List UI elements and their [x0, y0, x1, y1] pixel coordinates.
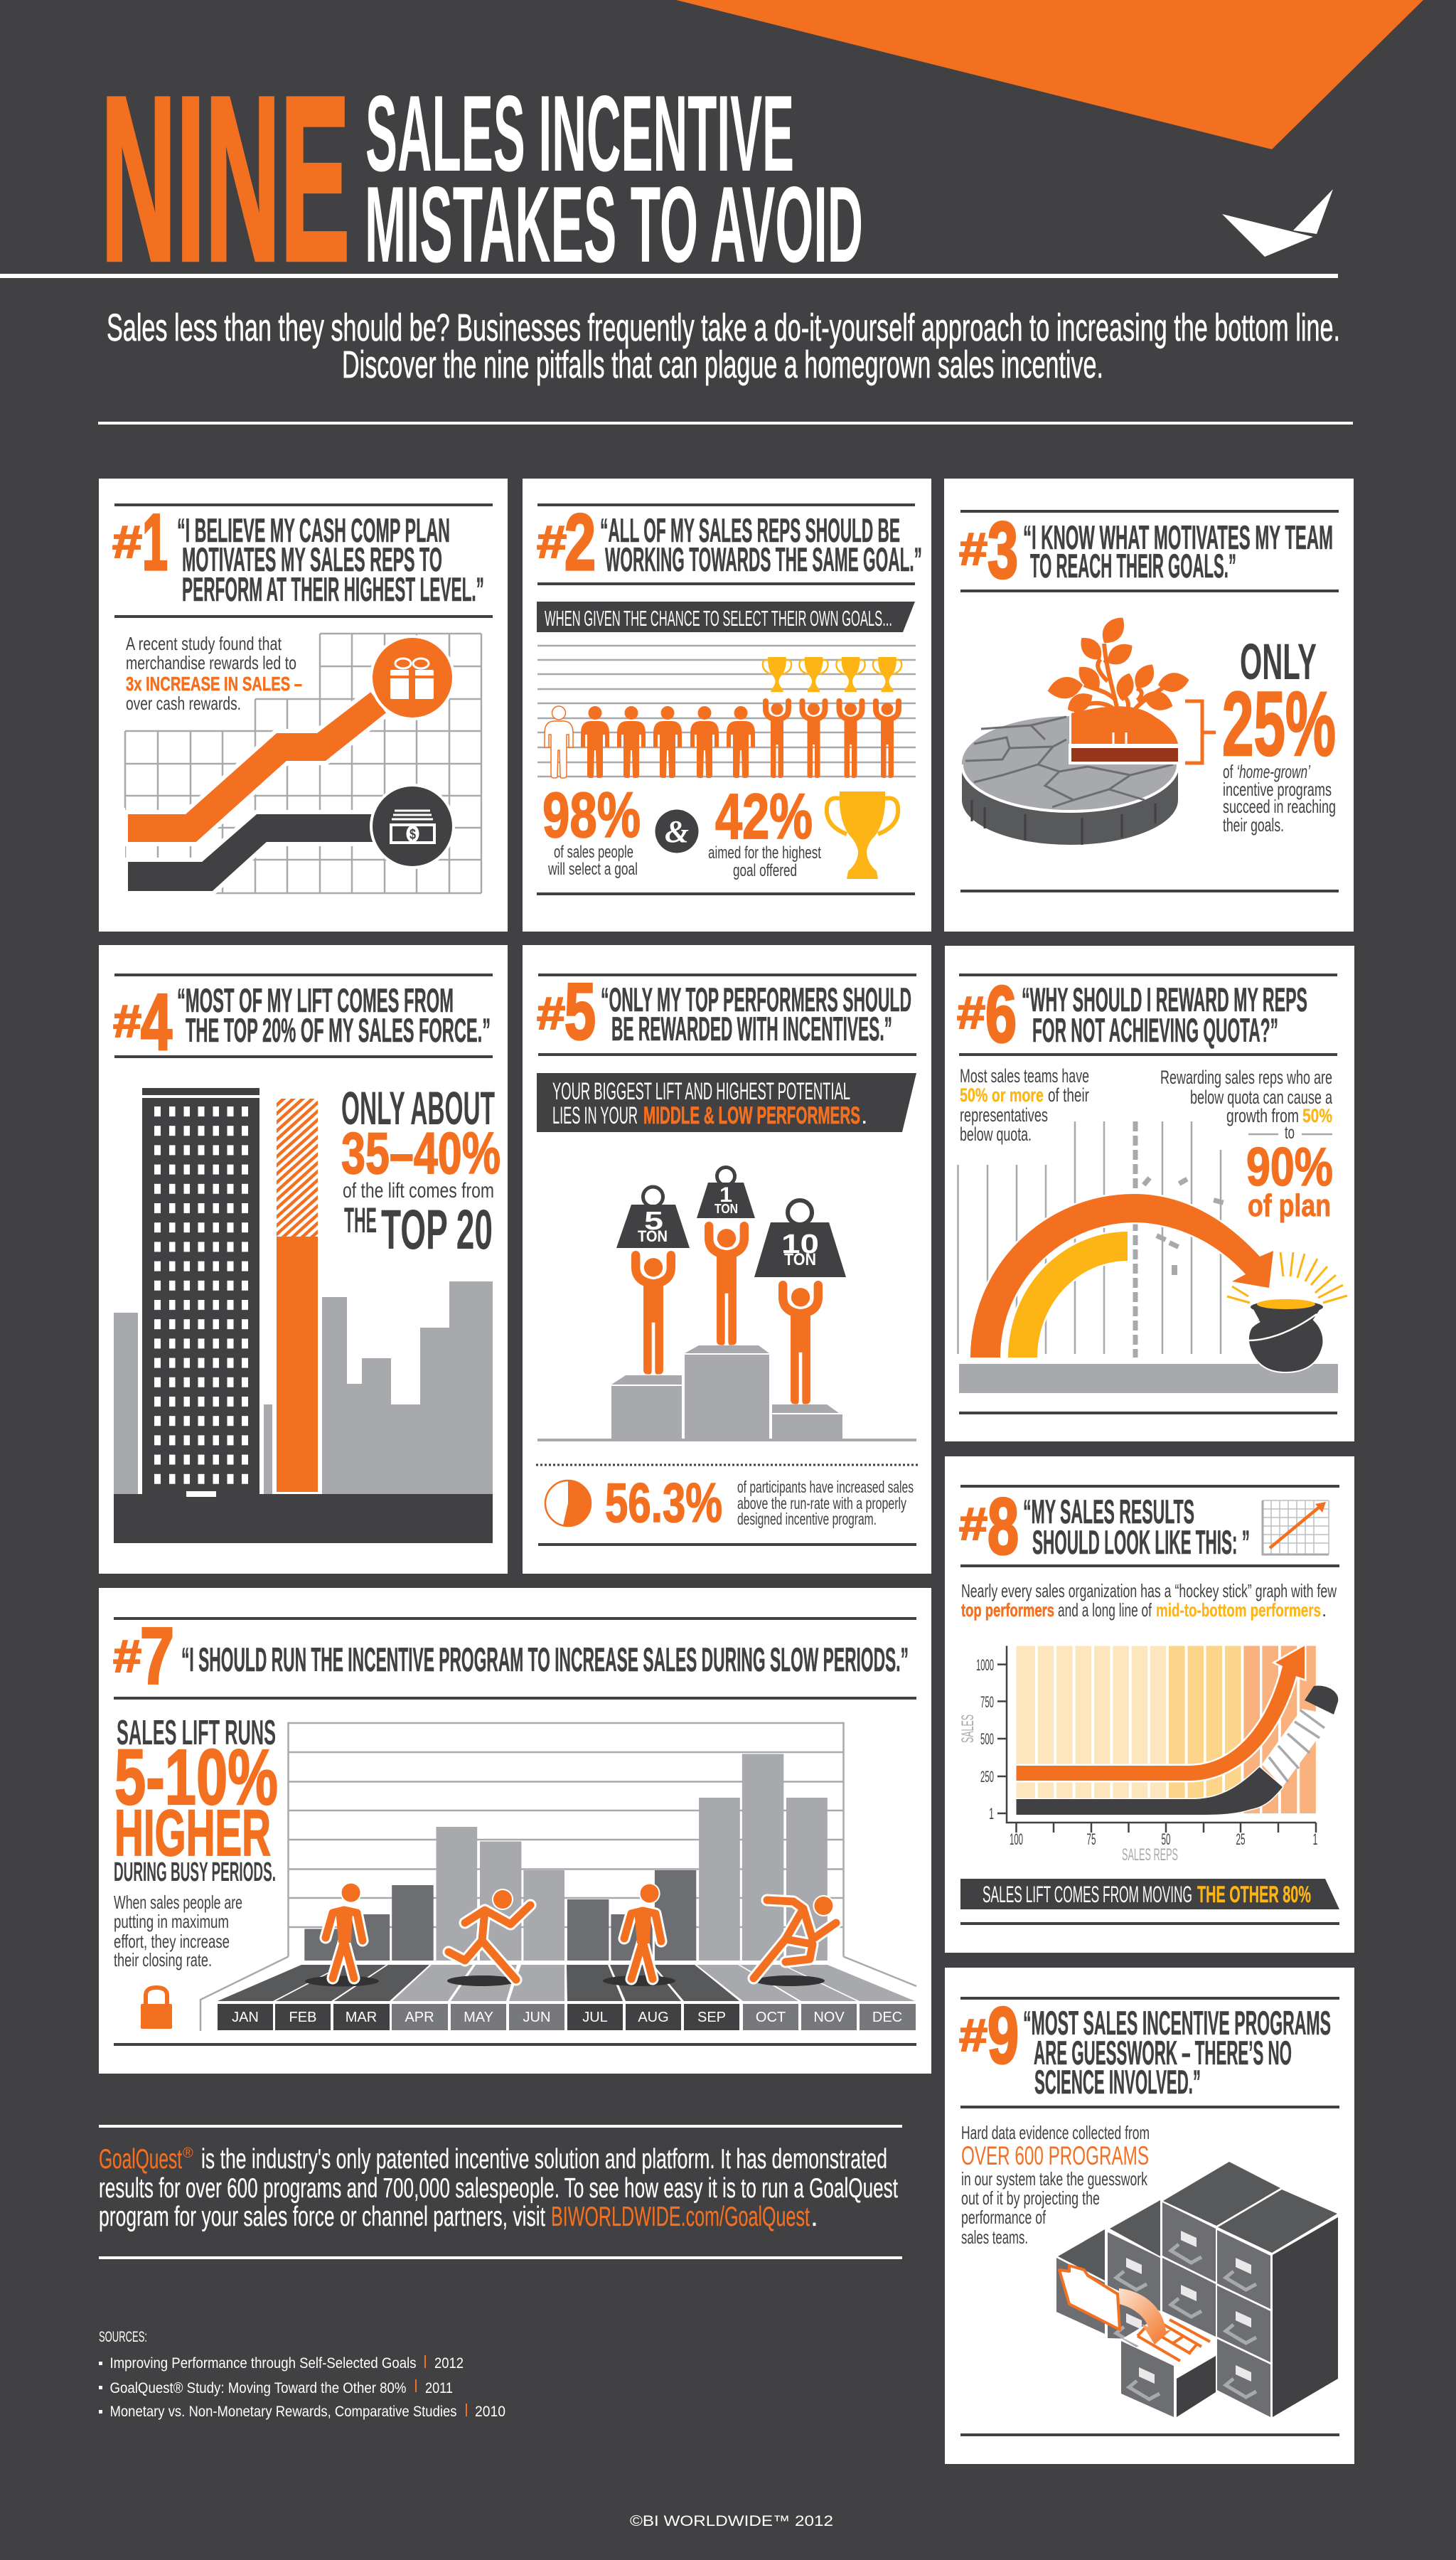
- icon: plant: [1046, 612, 1191, 744]
- text: hockey stick: [961, 1580, 1337, 1621]
- copyright: ©BI WORLDWIDE™ 2012: [630, 2513, 833, 2529]
- icon: ampersand: &: [665, 814, 689, 849]
- weight: 1 ton: TON: [714, 1202, 738, 1216]
- stat: 42%: goal offered: [733, 861, 797, 880]
- icon: logo check mark: [1222, 189, 1333, 257]
- text: hard data: performance of: [961, 2207, 1046, 2228]
- sources: GoalQuest® Study: Moving Toward the Other 80%: [109, 2380, 407, 2396]
- icon: gift: [370, 635, 455, 720]
- stat: 98%: of sales people: [554, 843, 633, 862]
- heading: mistake 8: [959, 1482, 1250, 1571]
- axis labels: 750: [980, 1693, 994, 1711]
- text: hard data: sales teams.: [961, 2226, 1028, 2248]
- axis labels: 75: [1086, 1830, 1096, 1848]
- chart: pie 56.3 percent: [545, 1481, 592, 1526]
- month labels: SEP: [697, 2010, 726, 2025]
- axis labels: 1: [1312, 1830, 1318, 1848]
- sources: SOURCES:: [99, 2329, 147, 2345]
- stat: 35-40%: ONLY ABOUT: [341, 1082, 495, 1134]
- sources: [99, 2329, 505, 2420]
- closing statement: is the industry's only patented incentive solution and platform. It has demonstrated: [201, 2144, 887, 2175]
- figure: runner one: [449, 1889, 530, 1980]
- stat: only 25%: of ‘home-grown’: [1223, 761, 1311, 782]
- stat: 5-10% higher: effort, they increase: [114, 1931, 230, 1952]
- chart: monthly sales bars: [200, 1723, 916, 2031]
- stat: 35-40%: 35–40%: [341, 1120, 500, 1186]
- month labels: AUG: [638, 2010, 669, 2025]
- chart: hockey stick graph: [958, 1646, 1338, 1865]
- chart: rising merchandise line over cash line: [121, 634, 481, 900]
- stat: 56.3%: above the run-rate with a properly: [737, 1494, 906, 1513]
- panel: mistake 1: PERFORM AT THEIR HIGHEST LEVEL.”: [182, 570, 484, 608]
- axis labels: 50: [1162, 1830, 1170, 1848]
- sources: 2011: [425, 2380, 453, 2396]
- text: hard data: [961, 2122, 1150, 2248]
- heading: mistake 1: [112, 498, 484, 608]
- stat: 42%: 42%: [715, 782, 813, 853]
- heading: mistake 1: #: [112, 516, 142, 567]
- heading: mistake 7: 7: [140, 1611, 174, 1700]
- text: below quota: Most sales teams have: [960, 1065, 1089, 1087]
- hockey stick: [1017, 1685, 1338, 1815]
- text: growth to 90 percent of plan: below quota can cause a: [1190, 1087, 1333, 1108]
- text: study finding: merchandise rewards led to: [126, 652, 296, 673]
- banner: select goals: [537, 602, 915, 632]
- axis labels: 500: [980, 1730, 994, 1748]
- text: hockey stick: top performers: [961, 1599, 1054, 1621]
- heading: mistake 7: #: [113, 1631, 141, 1682]
- icon: padlock: [141, 1988, 172, 2029]
- heading: mistake 8: “MY SALES RESULTS: [1023, 1493, 1194, 1530]
- heading: mistake 3: 3: [987, 506, 1018, 594]
- month labels: JUN: [523, 2010, 550, 2025]
- closing statement: program for your sales force or channel partners, visit: [99, 2202, 545, 2232]
- heading: mistake 6: [957, 970, 1307, 1059]
- month labels: DEC: [872, 2010, 902, 2025]
- panel: mistake 5: [523, 945, 931, 1574]
- text: growth to 90 percent of plan: growth from: [1226, 1105, 1299, 1126]
- axis labels: 1: [989, 1805, 994, 1823]
- stat: only 25%: ONLY: [1240, 634, 1317, 690]
- text: below quota: below quota.: [960, 1124, 1032, 1145]
- heading: mistake 5: BE REWARDED WITH INCENTIVES.”: [611, 1010, 892, 1047]
- chart: pictogram of sales people and trophies: [537, 646, 916, 778]
- stat: 56.3%: of participants have increased sales: [737, 1478, 914, 1496]
- closing statement: BIWORLDWIDE.com/GoalQuest: [551, 2202, 810, 2232]
- stat: 35-40%: TOP 20: [381, 1198, 493, 1261]
- stat: 42%: aimed for the highest: [708, 843, 821, 863]
- heading: mistake 2: #: [537, 516, 567, 567]
- text: growth to 90 percent of plan: [1160, 1067, 1333, 1223]
- stat: 56.3%: designed incentive program.: [737, 1510, 877, 1528]
- title: SALES INCENTIVE: [365, 73, 794, 194]
- weight: 5 ton: TON: [638, 1227, 668, 1245]
- heading: mistake 2: “ALL OF MY SALES REPS SHOULD BE: [600, 511, 900, 549]
- banner: biggest lift: LIES IN YOUR: [552, 1102, 638, 1129]
- weight: 5 ton: 5: [644, 1206, 663, 1235]
- text: below quota: 50% or more: [960, 1084, 1044, 1106]
- month labels: MAR: [346, 2010, 377, 2025]
- text: hockey stick: and a long line of: [1058, 1599, 1152, 1621]
- text: WORKING TOWARDS THE SAME GOAL.”: [605, 540, 922, 578]
- stat: only 25%: 25%: [1222, 673, 1336, 775]
- arrow and folder: [1059, 2266, 1172, 2345]
- icon: cash: [370, 784, 455, 869]
- heading: mistake 5: [537, 967, 911, 1056]
- month labels: MAY: [464, 2010, 493, 2025]
- text: MISTAKES TO AVOID: [365, 164, 863, 285]
- closing statement: results for over 600 programs and 700,000 salespeople. To see how easy it is to run a GoalQuest: [99, 2173, 898, 2204]
- closing statement: GoalQuest: [99, 2144, 182, 2175]
- stat: 98%: 98%: [542, 780, 641, 851]
- figure: walker two: [624, 1883, 661, 1979]
- sources: Monetary vs. Non-Monetary Rewards, Comparative Studies: [109, 2404, 456, 2420]
- heading: mistake 4: THE TOP 20% OF MY SALES FORCE.”: [186, 1011, 491, 1049]
- text: study finding: A recent study found that: [126, 633, 282, 654]
- text: growth to 90 percent of plan: 90%: [1246, 1137, 1333, 1198]
- text: growth to 90 percent of plan: 50%: [1302, 1105, 1332, 1126]
- sources: 2010: [475, 2404, 505, 2420]
- stat: 56.3%: 56.3%: [605, 1471, 722, 1534]
- weight: 1 ton: [697, 1168, 755, 1218]
- weight: 10 ton: TON: [784, 1250, 816, 1269]
- heading: mistake 6: #: [957, 987, 985, 1038]
- text: hockey stick: .: [1322, 1599, 1327, 1621]
- icon: cash: $: [410, 827, 416, 843]
- axis labels: 100: [1010, 1830, 1023, 1848]
- figure: walker one: [326, 1882, 363, 1978]
- heading: mistake 2: 2: [564, 498, 596, 587]
- month labels: APR: [405, 2010, 434, 2025]
- axis labels: [958, 1656, 1318, 1865]
- heading: mistake 2: [537, 498, 922, 587]
- stat: 35-40%: of the lift comes from: [343, 1179, 494, 1202]
- heading: mistake 1: MOTIVATES MY SALES REPS TO: [182, 540, 442, 578]
- text: growth to 90 percent of plan: to: [1285, 1123, 1295, 1143]
- orange corner shape: [676, 0, 1423, 149]
- stat: only 25%: [1222, 634, 1336, 836]
- text: below quota: representatives: [960, 1104, 1048, 1126]
- stat: only 25%: their goals.: [1223, 814, 1284, 836]
- stat: 35-40%: [341, 1082, 500, 1261]
- heading: mistake 3: #: [959, 523, 987, 575]
- banner: biggest lift: MIDDLE & LOW PERFORMERS: [643, 1102, 860, 1129]
- text: hard data: in our system take the guesswork: [961, 2168, 1148, 2190]
- icon: mini rising chart: [1263, 1500, 1329, 1554]
- illustration: arc to pot of gold: [958, 1121, 1347, 1393]
- stat: 5-10% higher: [114, 1714, 278, 1970]
- sources: Improving Performance through Self-Selected Goals: [109, 2355, 417, 2372]
- weight: 10 ton: [754, 1200, 846, 1277]
- bracket: [1185, 701, 1216, 763]
- banner: biggest lift: [537, 1073, 916, 1132]
- icon: ampersand: [655, 809, 698, 853]
- text: hard data: OVER 600 PROGRAMS: [961, 2141, 1149, 2170]
- panel: mistake 3: [944, 479, 1354, 932]
- heading: mistake 4: 4: [141, 978, 172, 1067]
- illustration: podium with weights: [537, 1168, 916, 1441]
- weight: 1 ton: 1: [719, 1183, 732, 1207]
- month labels: OCT: [756, 2010, 786, 2025]
- heading: mistake 8: #: [959, 1498, 987, 1550]
- stat: 5-10% higher: 5-10%: [114, 1734, 278, 1821]
- panel: mistake 4: [99, 945, 508, 1574]
- axis labels: 250: [980, 1768, 994, 1786]
- stat: 35-40%: THE: [344, 1200, 377, 1240]
- month labels: NOV: [813, 2010, 845, 2025]
- illustration: cracked disk with growing slice: [962, 612, 1191, 845]
- arrow: rising sales line: [1017, 1646, 1305, 1781]
- axis labels: SALES: [958, 1714, 978, 1743]
- stat: 42%: [708, 782, 821, 880]
- text: study finding: 3x INCREASE IN SALES –: [126, 673, 302, 695]
- month labels: JAN: [232, 2010, 259, 2025]
- stat: 5-10% higher: their closing rate.: [114, 1949, 212, 1970]
- closing statement: .: [810, 2202, 818, 2232]
- heading: mistake 1: “I BELIEVE MY CASH COMP PLAN: [177, 511, 450, 549]
- panel: mistake 6: [945, 946, 1354, 1441]
- panel: mistake 1: [99, 479, 508, 932]
- open drawer: [1121, 2313, 1216, 2417]
- text: hard data: out of it by projecting the: [961, 2187, 1100, 2209]
- stat: 5-10% higher: DURING BUSY PERIODS.: [114, 1857, 276, 1887]
- text: growth to 90 percent of plan: of plan: [1248, 1188, 1331, 1223]
- stat: 98%: will select a goal: [547, 860, 638, 879]
- bar: share of lift: [277, 1099, 318, 1492]
- heading: mistake 5: #: [537, 988, 565, 1039]
- text: study finding: over cash rewards.: [126, 693, 241, 714]
- banner: the other 80%: THE OTHER 80%: [1197, 1882, 1311, 1907]
- axis labels: 25: [1236, 1830, 1246, 1848]
- banner: biggest lift: .: [861, 1102, 867, 1129]
- stat: 5-10% higher: HIGHER: [114, 1797, 271, 1870]
- stat: 5-10% higher: When sales people are: [114, 1892, 242, 1913]
- icon: large trophy: [827, 791, 898, 879]
- heading: mistake 4: [113, 978, 491, 1067]
- text: study finding: [126, 633, 302, 714]
- month labels: FEB: [289, 2010, 316, 2025]
- heading: mistake 4: #: [113, 996, 141, 1047]
- weight: 10 ton: 10: [781, 1230, 819, 1259]
- stat: only 25%: succeed in reaching: [1223, 796, 1336, 817]
- panel: mistake 7: [99, 1588, 931, 2074]
- heading: mistake 7: [113, 1611, 909, 1700]
- heading: mistake 9: [959, 1991, 1331, 2101]
- heading: mistake 5: 5: [564, 967, 596, 1056]
- heading: mistake 3: [959, 506, 1333, 594]
- heading: mistake 4: “MOST OF MY LIFT COMES FROM: [177, 981, 454, 1019]
- panel: mistake 8: [945, 1456, 1354, 1953]
- heading: mistake 8: 8: [987, 1482, 1019, 1571]
- sources: 2012: [434, 2355, 464, 2372]
- stat: only 25%: incentive programs: [1223, 779, 1332, 800]
- heading: mistake 3: TO REACH THEIR GOALS.”: [1030, 547, 1236, 585]
- banner: select goals: WHEN GIVEN THE CHANCE TO SELECT THEIR OWN GOALS...: [545, 606, 892, 631]
- heading: mistake 9: 9: [987, 1991, 1019, 2080]
- text: below quota: of their: [1048, 1084, 1089, 1106]
- stat: 5-10% higher: putting in maximum: [114, 1911, 229, 1932]
- panel: mistake 2: [523, 479, 931, 932]
- text: below quota: [960, 1065, 1089, 1145]
- closing statement: [99, 2125, 902, 2259]
- stat: 5-10% higher: SALES LIFT RUNS: [117, 1714, 276, 1752]
- title: NINE: [101, 48, 350, 309]
- illustration: skyline with tower and lift bar: [114, 1088, 493, 1543]
- stat: 98%: [542, 780, 641, 879]
- heading: mistake 9: #: [959, 2010, 987, 2061]
- icon: pot of gold: [1227, 1252, 1347, 1372]
- heading: mistake 1: 1: [142, 498, 168, 587]
- banner: biggest lift: YOUR BIGGEST LIFT AND HIGHEST POTENTIAL: [552, 1078, 850, 1105]
- month labels: [218, 2004, 916, 2030]
- text: hard data: Hard data evidence collected from: [961, 2122, 1150, 2143]
- axis labels: 1000: [976, 1656, 994, 1674]
- panel: mistake 9: [945, 1968, 1354, 2464]
- heading: mistake 9: SCIENCE INVOLVED.”: [1034, 2063, 1201, 2101]
- month labels: JUL: [582, 2010, 608, 2025]
- figure: runner two: [754, 1895, 836, 1978]
- illustration: filing cabinets: [1056, 2162, 1338, 2417]
- heading: mistake 6: 6: [985, 970, 1017, 1059]
- text: growth to 90 percent of plan: Rewarding sales reps who are: [1160, 1067, 1332, 1088]
- closing statement: ®: [183, 2145, 193, 2161]
- banner: the other 80%: SALES LIFT COMES FROM MOVING: [983, 1882, 1192, 1907]
- stat: 56.3%: [545, 1471, 914, 1534]
- panel: mistake 5: “ONLY MY TOP PERFORMERS SHOULD: [601, 981, 911, 1018]
- axis labels: SALES REPS: [1122, 1845, 1178, 1865]
- text: hockey stick: mid-to-bottom performers: [1156, 1599, 1321, 1621]
- intro text: [107, 306, 1340, 386]
- weight: 5 ton: [616, 1187, 690, 1248]
- floor: [218, 1965, 915, 2001]
